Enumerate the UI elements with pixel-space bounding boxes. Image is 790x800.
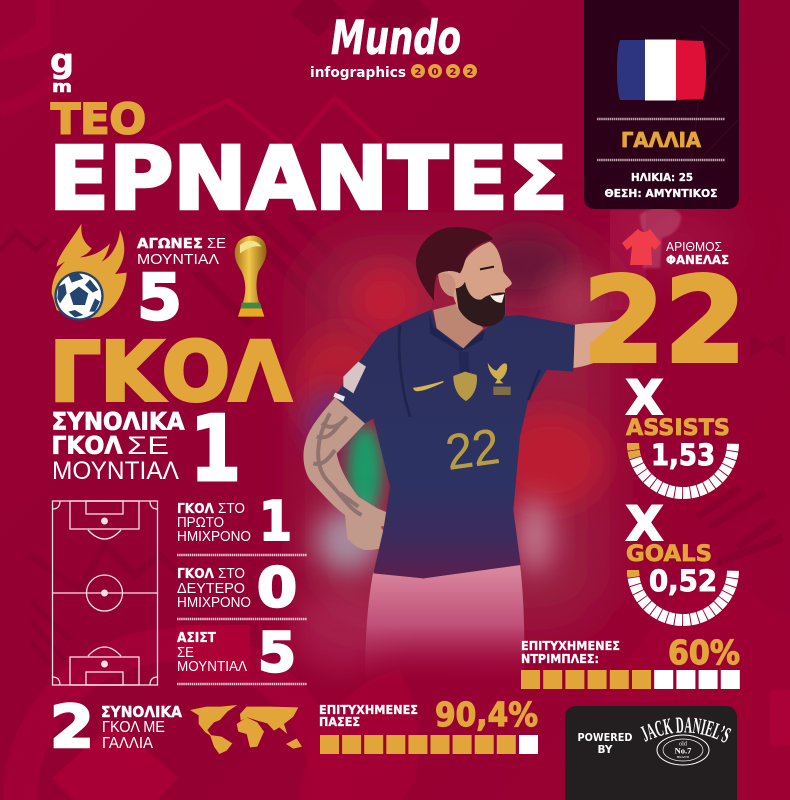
logo: Gazzetta mark	[50, 41, 74, 96]
gauge	[633, 443, 733, 493]
stat: successful passes: ΠΑΣΕΣ	[319, 714, 360, 729]
title: Mundo infographics	[310, 11, 477, 81]
stat: goals with France	[50, 692, 182, 761]
year badges: 2	[467, 67, 474, 78]
icon: jersey	[622, 229, 661, 265]
stat: goals with France: ΣΥΝΟΛΙΚΑ	[101, 703, 182, 721]
powered by: POWERED	[578, 732, 633, 744]
icon: football with flames	[52, 223, 127, 321]
stat: expected goals: X	[626, 497, 663, 552]
year badges: 2	[450, 67, 457, 78]
stat: expected goals	[626, 497, 733, 620]
logo: Jack Daniel's: No.7	[675, 746, 692, 756]
stat: expected assists: ASSISTS	[626, 415, 730, 441]
stat: assists: 5	[258, 621, 296, 684]
tattooed left arm	[303, 397, 403, 550]
heading: goals: ΓΚΟΛ	[50, 326, 291, 420]
logo: Jack Daniel's	[640, 717, 732, 766]
stat: assists: ΑΣΙΣΤ	[177, 630, 217, 646]
label: matches at World Cup: ΜΟΥΝΤΙΑΛ	[137, 252, 219, 268]
label: shirt number	[666, 239, 729, 267]
icon: French flag	[617, 40, 706, 100]
stat: goals second half: ΔΕΥΤΕΡΟ	[177, 581, 245, 597]
stat: successful dribbles: 60%	[668, 633, 740, 672]
stat: successful passes: ΕΠΙΤΥΧΗΜΕΝΕΣ	[319, 702, 418, 717]
stat: goals second half: 0	[257, 556, 297, 619]
gauge	[633, 570, 733, 620]
shorts	[365, 564, 524, 687]
logo: Jack Daniel's: BRAND	[677, 755, 690, 759]
panel: country	[584, 0, 739, 209]
stat: goals first half	[177, 490, 292, 553]
stat: expected assists: 1,53	[651, 438, 715, 472]
player figure	[303, 227, 623, 687]
label: matches at World Cup	[137, 236, 226, 268]
logo: Gazzetta mark: m	[52, 77, 72, 96]
powered by: BY	[597, 744, 613, 756]
stat: goals second half: ΓΚΟΛ	[177, 566, 214, 582]
total goals at World Cup: ΣΕ	[127, 432, 169, 460]
shirt number: 22	[583, 252, 746, 389]
progress squares	[521, 670, 740, 689]
player surname: ΕΡΝΑΝΤΕΣ	[49, 129, 568, 229]
title: Mundo infographics: infographics	[310, 65, 406, 81]
stat: successful dribbles	[521, 633, 740, 689]
year badges: 0	[432, 67, 439, 78]
icon: football pitch	[52, 501, 158, 685]
panel: sponsor	[565, 706, 737, 800]
stat: expected goals: 0,52	[649, 564, 717, 598]
age and position: ΗΛΙΚΙΑ: 25	[631, 172, 693, 184]
stat: expected goals: GOALS	[626, 541, 712, 567]
logo: Jack Daniel's: JACK DANIEL’S	[640, 717, 732, 742]
total goals at World Cup: ΜΟΥΝΤΙΑΛ	[52, 457, 179, 485]
faded raised fist	[640, 208, 681, 268]
player photo background	[290, 212, 735, 670]
stat: successful dribbles: ΕΠΙΤΥΧΗΜΕΝΕΣ	[521, 638, 620, 653]
title: Mundo infographics: Mundo	[331, 11, 461, 66]
stat: expected assists	[626, 371, 733, 493]
age and position	[604, 172, 718, 200]
number of matches: 5	[137, 261, 182, 334]
stat: goals second half: ΣΤΟ	[218, 566, 245, 582]
icon: World Cup trophy	[235, 236, 266, 317]
total goals at World Cup: ΓΚΟΛ	[52, 432, 123, 460]
stat: assists: ΜΟΥΝΤΙΑΛ	[177, 659, 247, 675]
head	[416, 227, 512, 327]
total goals at World Cup	[52, 408, 185, 485]
stat: goals first half: 1	[259, 490, 292, 553]
player first name: ΤΕΟ	[51, 94, 146, 144]
stat: successful passes	[319, 695, 538, 754]
stat: successful dribbles: ΝΤΡΙΜΠΛΕΣ:	[521, 651, 599, 666]
progress squares	[320, 735, 538, 754]
neck	[433, 303, 483, 348]
year badges	[411, 64, 477, 78]
stat: goals second half	[177, 556, 297, 619]
stat: goals with France: ΓΚΟΛ ΜΕ	[102, 719, 165, 736]
icon: world map	[190, 705, 302, 754]
label: matches at World Cup: ΑΓΩΝΕΣ	[137, 236, 203, 252]
stat: successful passes: 90,4%	[435, 695, 538, 734]
stat: goals first half: ΣΤΟ	[218, 501, 245, 517]
powered by	[578, 732, 633, 756]
country name: ΓΑΛΛΙΑ	[621, 128, 701, 152]
stat: assists	[177, 621, 296, 684]
stat: goals with France: 2	[50, 692, 94, 761]
age and position: ΘΕΣΗ: ΑΜΥΝΤΙΚΟΣ	[604, 188, 718, 200]
label: shirt number: ΦΑΝΕΛΑΣ	[666, 252, 729, 267]
jersey: 22	[442, 418, 503, 481]
stat: expected assists: X	[626, 371, 663, 426]
raised right arm	[570, 317, 623, 368]
label: matches at World Cup: ΣΕ	[207, 236, 226, 252]
stat: assists: ΣΕ	[177, 645, 194, 661]
logo: Gazzetta mark: g	[50, 41, 74, 80]
year badges: 2	[415, 67, 422, 78]
label: shirt number: ΑΡΙΘΜΟΣ	[666, 239, 722, 254]
logo: Jack Daniel's: old	[679, 742, 687, 748]
jersey	[333, 309, 575, 578]
total goals number: 1	[190, 397, 241, 502]
stat: goals second half: ΗΜΙΧΡΟΝΟ	[177, 595, 251, 611]
stat: goals first half: ΓΚΟΛ	[177, 501, 214, 517]
stat: goals first half: ΠΡΩΤΟ	[177, 515, 224, 531]
stat: goals first half: ΗΜΙΧΡΟΝΟ	[177, 529, 251, 545]
total goals at World Cup: ΣΥΝΟΛΙΚΑ	[52, 408, 185, 436]
stat: goals with France: ΓΑΛΛΙΑ	[102, 735, 153, 752]
